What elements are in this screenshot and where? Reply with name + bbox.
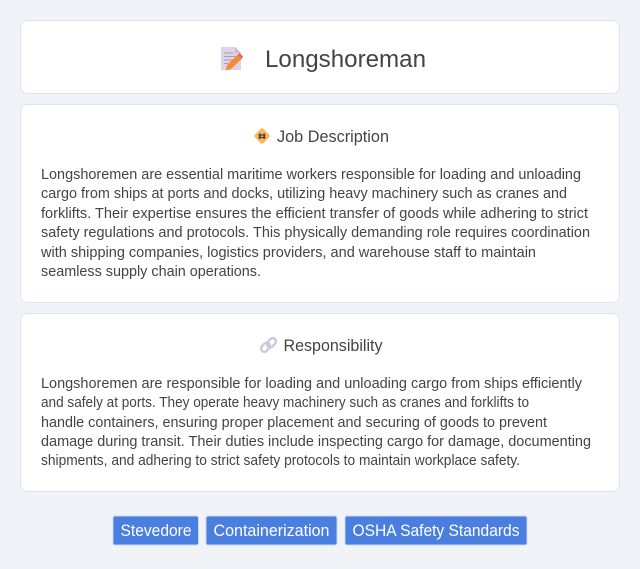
job description text: with shipping companies, logistics providers, and warehouse staff to maintain — [40, 245, 536, 261]
tag: OSHA Safety Standards: OSHA Safety Standards — [352, 522, 520, 540]
tag: Containerization: Containerization — [214, 522, 330, 540]
icon: chain link — [260, 337, 277, 353]
job description text: cargo from ships at ports and docks, utilizing heavy machinery such as cranes and — [41, 186, 567, 202]
heading: responsibility: Responsibility — [284, 337, 383, 355]
job description text: Longshoremen are essential maritime workers responsible for loading and unloading — [41, 167, 581, 183]
panel: title — [20, 20, 620, 94]
panel: job description — [20, 104, 620, 302]
job description text — [40, 167, 590, 280]
tag: Stevedore: Stevedore — [120, 522, 192, 540]
icon: memo with pencil — [221, 47, 243, 70]
panel: responsibility — [20, 314, 620, 492]
tag: Stevedore — [113, 516, 198, 545]
job description text: forklifts. Their expertise ensures the efficient transfer of goods while adhering to strict — [41, 206, 588, 222]
tags row — [113, 516, 527, 545]
icon: construction diamond — [254, 128, 270, 144]
heading: job description: Job Description — [277, 128, 389, 146]
tag: Containerization — [206, 516, 337, 545]
responsibility text: Longshoremen are responsible for loading and unloading cargo from ships efficiently — [41, 376, 583, 392]
responsibility text — [41, 376, 591, 469]
responsibility text: damage during transit. Their duties include inspecting cargo for damage, documenting — [41, 434, 591, 450]
responsibility text: shipments, and adhering to strict safety protocols to maintain workplace safety. — [41, 453, 520, 469]
responsibility text: and safely at ports. They operate heavy machinery such as cranes and forklifts to — [41, 395, 529, 411]
title text: Longshoreman — [265, 46, 426, 73]
job description text: safety regulations and protocols. This physically demanding role requires coordination — [41, 225, 590, 241]
job description text: seamless supply chain operations. — [41, 264, 261, 280]
tag: OSHA Safety Standards — [345, 516, 527, 545]
responsibility text: handle containers, ensuring proper placement and securing of goods to prevent — [41, 415, 547, 431]
